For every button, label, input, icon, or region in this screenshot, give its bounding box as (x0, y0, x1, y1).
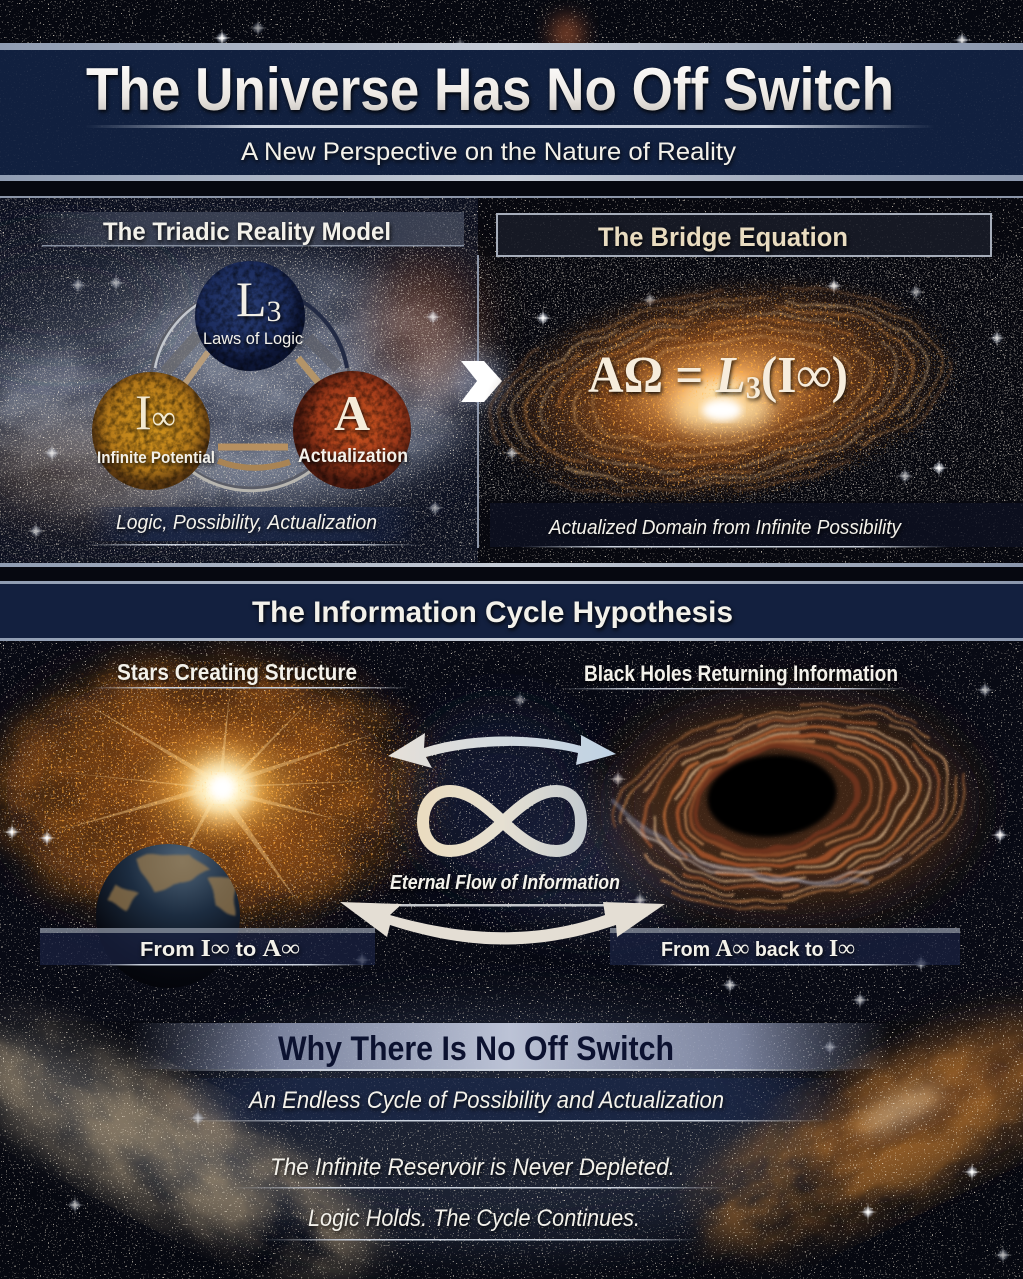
heading box (497, 214, 991, 256)
caption (85, 507, 420, 546)
sub-heading: black holes returning information: Black Holes Returning Information (584, 661, 898, 686)
node: actualization: Actualization (298, 446, 408, 467)
illustration: black hole (599, 678, 983, 932)
statement one: The Infinite Reservoir is Never Depleted. (270, 1154, 675, 1181)
galaxy illustration (482, 276, 969, 506)
banner heading: Why There Is No Off Switch (278, 1030, 674, 1068)
heading band (40, 212, 464, 246)
node: laws of logic: Laws of Logic (203, 329, 303, 348)
panel: information cycle heading (0, 563, 1023, 641)
panel: triadic reality model (40, 212, 464, 546)
sub-heading: stars creating structure: Stars Creating Structure (117, 659, 357, 685)
divider arrow (458, 255, 506, 548)
node: laws of logic: L (236, 271, 267, 327)
icon: infinity (423, 791, 581, 851)
panel: bridge equation (466, 214, 1023, 548)
node: actualization: A (334, 385, 370, 441)
illustration: exploding star (0, 660, 455, 930)
node: laws of logic (195, 261, 305, 371)
band: from I to A (40, 928, 375, 966)
illustration: planet (96, 844, 240, 988)
sub-heading: An Endless Cycle of Possibility and Actualization (247, 1087, 724, 1114)
label: eternal flow: Eternal Flow of Information (390, 872, 620, 894)
subtitle: A New Perspective on the Nature of Reality (241, 138, 737, 166)
panel: why there is no off switch (130, 1023, 890, 1240)
caption: Actualized Domain from Infinite Possibility (548, 517, 902, 539)
band: from A back to I: From A∞ back to I∞ (661, 936, 855, 962)
arrow: top two-way (388, 733, 616, 768)
caption: Logic, Possibility, Actualization (116, 512, 377, 534)
band: from I to A: From I∞ to A∞ (140, 936, 300, 962)
title: The Universe Has No Off Switch (86, 56, 894, 123)
captions under illustrations (40, 928, 960, 966)
arrow: bottom two-way (340, 902, 665, 944)
node: infinite potential: I∞ (135, 384, 176, 440)
heading band: The Triadic Reality Model (103, 218, 391, 246)
banner heading (130, 1023, 890, 1071)
node: infinite potential: Infinite Potential (97, 448, 215, 467)
node: infinite potential (92, 372, 215, 490)
node: actualization (293, 371, 411, 489)
equation: 3 (746, 369, 761, 405)
node: laws of logic: 3 (267, 295, 282, 328)
panel: information cycle heading: The Information Cycle Hypothesis (252, 596, 733, 629)
header banner (0, 43, 1023, 198)
equation: (I∞) (761, 347, 848, 404)
statement two: Logic Holds. The Cycle Continues. (308, 1205, 640, 1232)
equation: AΩ = L (588, 347, 747, 404)
connecting ring (150, 288, 350, 491)
caption (490, 503, 1023, 548)
sub-heading (170, 1078, 850, 1122)
band: from A back to I (610, 928, 960, 966)
heading box: The Bridge Equation (598, 222, 848, 252)
